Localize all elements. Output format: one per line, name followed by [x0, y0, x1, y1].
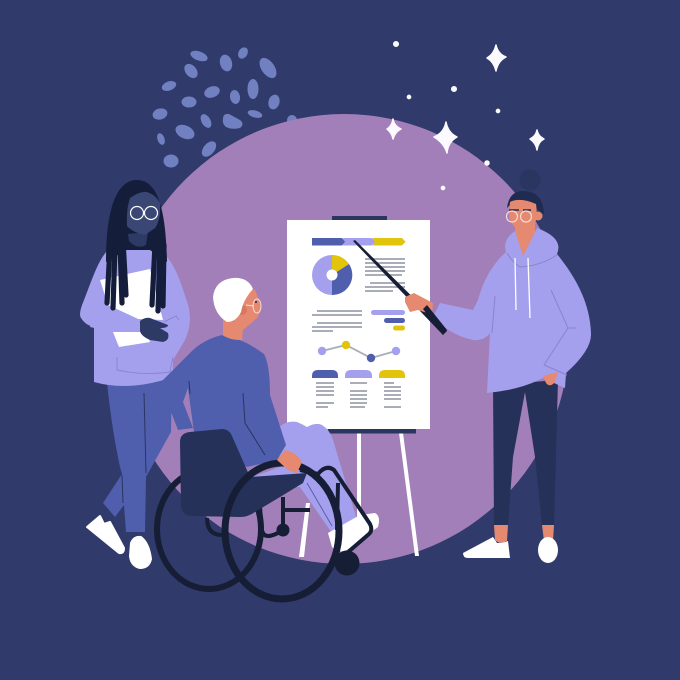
pill bars — [371, 310, 405, 330]
head and face — [232, 290, 261, 330]
drawstrings — [515, 258, 530, 318]
leggings — [493, 380, 558, 525]
glasses — [246, 299, 261, 313]
eyebrows — [509, 209, 531, 211]
hoodie seams — [492, 253, 576, 375]
front caster — [334, 550, 360, 576]
column tab headers — [312, 370, 405, 378]
sweater — [160, 335, 286, 467]
glasses — [130, 206, 158, 220]
presenting woman — [353, 170, 591, 563]
line chart — [318, 341, 400, 362]
ear — [237, 305, 247, 315]
easel legs — [299, 433, 419, 557]
hand — [140, 318, 168, 342]
white hair — [213, 278, 253, 322]
presentation board — [287, 216, 430, 434]
head — [127, 192, 160, 247]
face — [509, 200, 537, 232]
shoe — [328, 513, 379, 551]
wheelchair seat and backrest — [180, 429, 307, 517]
wheelchair front frame — [300, 468, 371, 553]
neck — [223, 318, 243, 342]
hand — [277, 450, 302, 473]
hair mass — [106, 180, 167, 262]
sneakers — [463, 537, 558, 563]
hair braids — [107, 240, 164, 311]
large purple circle — [119, 114, 569, 564]
glasses — [506, 211, 532, 222]
column text lines — [316, 382, 401, 408]
pants — [103, 378, 172, 532]
leaf blob cluster — [151, 46, 297, 168]
lilac trousers — [250, 422, 357, 533]
ankles — [494, 525, 554, 543]
hoodie — [433, 228, 591, 393]
pie chart — [312, 255, 352, 295]
hoodie — [80, 243, 190, 386]
wheelchair rear wheel and frame — [157, 469, 310, 589]
neck — [514, 222, 535, 256]
arrow progress bar — [312, 238, 406, 246]
ear — [534, 212, 542, 220]
sleeve — [90, 302, 142, 332]
woman with braids holding papers — [80, 180, 190, 568]
hair — [507, 191, 544, 214]
big wheel — [225, 463, 339, 599]
bun — [520, 170, 540, 190]
man in wheelchair — [160, 278, 379, 599]
shoes — [87, 516, 151, 568]
papers — [100, 269, 163, 347]
text lines left — [312, 310, 362, 332]
hoodie pocket line — [117, 316, 179, 374]
pocket hand — [543, 372, 558, 385]
pointer stick — [353, 240, 447, 335]
text lines beside pie — [365, 258, 405, 292]
stars and dots — [387, 42, 544, 190]
pointing hand — [405, 293, 433, 314]
